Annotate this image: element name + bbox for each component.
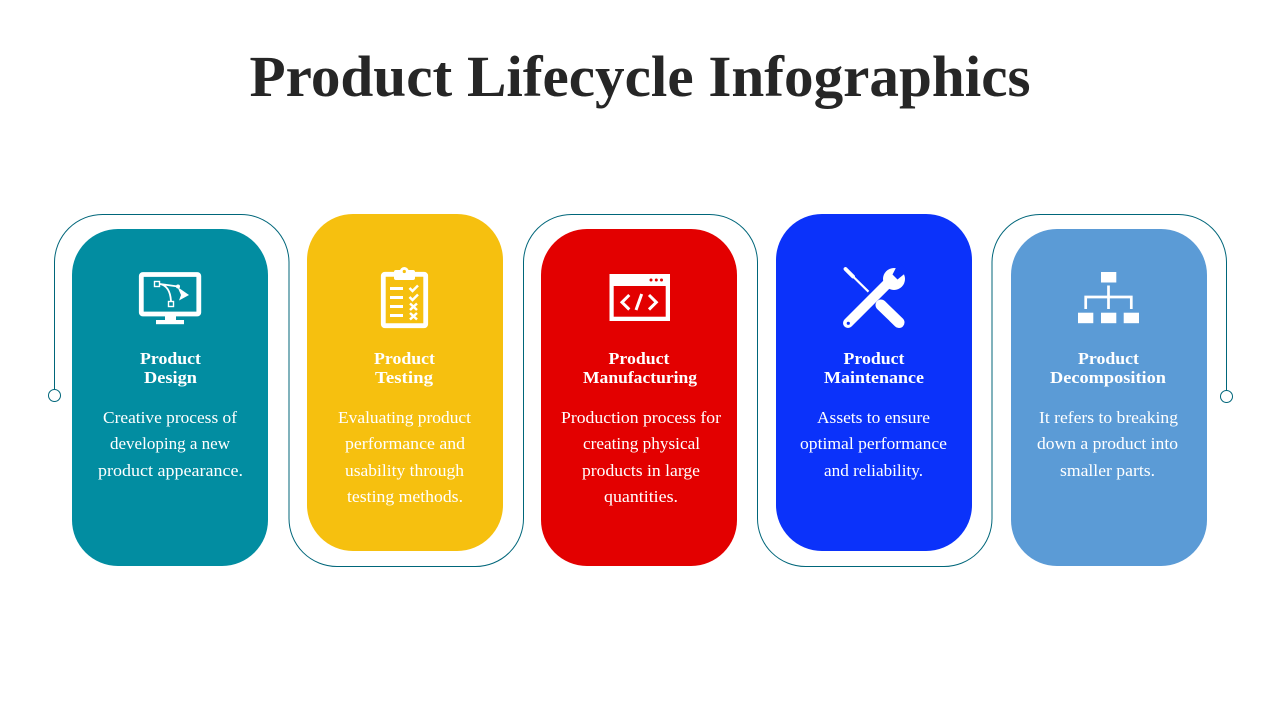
body text [98, 408, 243, 480]
panel: product manufacturing [541, 229, 737, 566]
body text: product appearance. [98, 461, 243, 480]
heading: Product [374, 349, 435, 368]
right end node [1220, 390, 1232, 402]
heading [824, 349, 924, 387]
heading [374, 349, 435, 387]
body text: usability through [345, 461, 465, 480]
card background [776, 214, 972, 551]
icon: wrench and screwdriver [846, 262, 908, 325]
heading [140, 349, 201, 387]
card background [1011, 229, 1207, 566]
icon: org hierarchy [1078, 272, 1139, 323]
heading: Product [608, 349, 670, 368]
icon: clipboard checklist [383, 267, 426, 326]
icon: monitor with bezier curve [141, 274, 199, 324]
panel: product maintenance [776, 214, 972, 551]
body text [800, 408, 947, 480]
heading: Product [1078, 349, 1139, 368]
body text: testing methods. [347, 487, 463, 506]
title: Product Lifecycle Infographics [250, 44, 1030, 109]
card background [72, 229, 268, 566]
body text: optimal performance [800, 434, 947, 453]
body text: developing a new [110, 434, 230, 453]
body text [561, 408, 722, 506]
body text: performance and [345, 434, 466, 453]
panel: product design [72, 229, 268, 566]
body text: Production process for [561, 408, 722, 427]
heading: Testing [375, 368, 434, 387]
panel: product decomposition [1011, 229, 1207, 566]
icon: code window [610, 274, 670, 321]
card background [541, 229, 737, 566]
panel: product testing [307, 214, 503, 551]
body text: creating physical [583, 434, 700, 453]
left end node [48, 390, 60, 402]
body text: smaller parts. [1060, 461, 1155, 480]
body text [338, 408, 471, 506]
body text: It refers to breaking [1039, 408, 1178, 427]
heading [1050, 349, 1167, 387]
body text [1037, 408, 1178, 480]
heading: Manufacturing [583, 368, 698, 387]
heading: Product [844, 349, 905, 368]
heading: Maintenance [824, 368, 924, 387]
body text: and reliability. [824, 461, 923, 480]
body text: Assets to ensure [817, 408, 930, 427]
body text: Creative process of [103, 408, 238, 427]
card background [307, 214, 503, 551]
heading [583, 349, 698, 387]
body text: Evaluating product [338, 408, 471, 427]
body text: quantities. [604, 487, 678, 506]
connector line [54, 214, 1226, 566]
heading: Design [144, 368, 198, 387]
body text: products in large [582, 461, 700, 480]
body text: down a product into [1037, 434, 1178, 453]
heading: Decomposition [1050, 368, 1167, 387]
heading: Product [140, 349, 201, 368]
